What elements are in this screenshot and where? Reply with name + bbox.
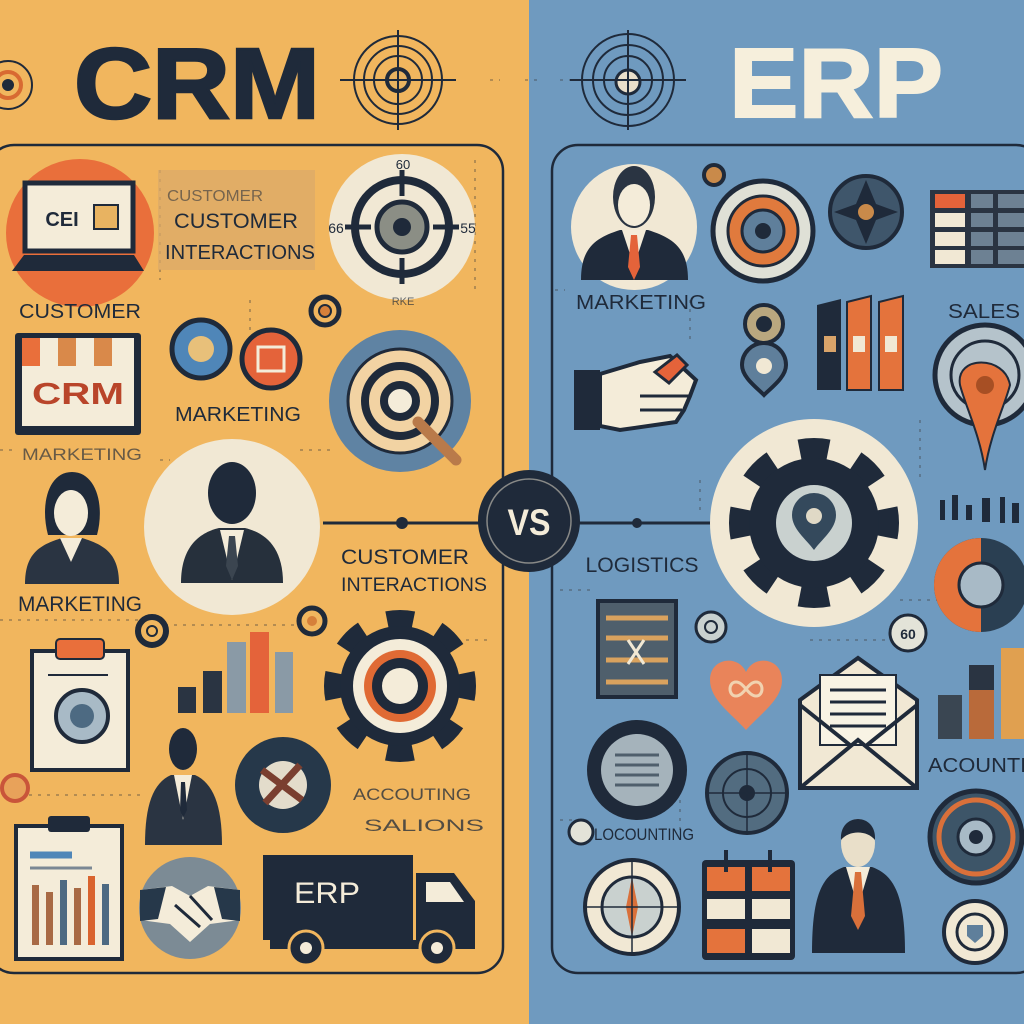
- label: faded marketing: MARKETING: [22, 445, 142, 464]
- icon: blue badge: [172, 320, 230, 378]
- icon: small ring: [299, 608, 325, 634]
- icon: gear with orange ring: [322, 608, 478, 764]
- label: customer interactions lower: CUSTOMER: [341, 546, 469, 569]
- icon: cream dial target: 60: [396, 157, 410, 172]
- icon: small ring left: [138, 617, 166, 645]
- icon: large person avatar: [144, 439, 320, 615]
- label: customer interactions lower: [341, 546, 487, 596]
- icon: target with magnifier: [329, 330, 471, 472]
- icon: handshake: [139, 857, 241, 959]
- icon: left top eye target: [0, 61, 32, 109]
- icon: ERP header target: [570, 30, 686, 130]
- bar chart: right: [938, 648, 1024, 739]
- icon: envelope: [800, 658, 917, 788]
- icon: location rings: [742, 305, 786, 395]
- icon: document list: [598, 601, 676, 697]
- icon: calendars: [702, 850, 795, 960]
- icon: radial emblem: [235, 737, 331, 833]
- connector left: [323, 517, 480, 529]
- icon: crosshair circle: [707, 753, 787, 833]
- icon: tall orange tags: [817, 296, 903, 390]
- icon: donut chart: [934, 538, 1024, 632]
- label: marketing center: MARKETING: [175, 404, 301, 426]
- icon: CRM store: [15, 333, 141, 435]
- icon: dark compass: [830, 176, 902, 248]
- icon: woman avatar: [25, 472, 119, 584]
- icon: dark list circle: [587, 720, 687, 820]
- VS badge: VS: [508, 502, 550, 543]
- icon: heart: [710, 661, 782, 730]
- icon: small shield circle: [944, 901, 1006, 963]
- connector right: [578, 518, 712, 528]
- icon: small ring 60: [890, 615, 926, 651]
- title: ERP: ERP: [729, 28, 943, 138]
- VS badge: [478, 470, 580, 572]
- text box: customer interactions: INTERACTIONS: [165, 242, 315, 264]
- icon: CRM header target: [340, 30, 456, 130]
- icon: ERP truck: [263, 855, 475, 965]
- label: accounting: ACCOUTING: [353, 785, 471, 804]
- label: salions: SALIONS: [364, 816, 484, 835]
- icon: orange ring: [930, 791, 1022, 883]
- icon: mini bars: [940, 495, 1019, 523]
- icon: laptop on orange circle: CEI: [45, 209, 79, 231]
- icon: small ring doc: [696, 612, 726, 642]
- text box: customer interactions: CUSTOMER: [167, 188, 263, 205]
- icon: clipboard with dial: [32, 639, 128, 770]
- label: customer: CUSTOMER: [19, 301, 141, 323]
- decorative dots: [0, 80, 990, 830]
- icon: large gear: [710, 419, 918, 627]
- label: customer interactions lower: INTERACTIONS: [341, 575, 487, 596]
- icon: laptop on orange circle: [6, 159, 154, 307]
- icon: cream dial target: 55: [460, 220, 476, 236]
- icon: compass cream: [585, 860, 679, 954]
- title: CRM: CRM: [74, 28, 320, 140]
- icon: orange target: [713, 181, 813, 281]
- icon: cream dial target: RKE: [392, 296, 414, 308]
- icon: bar chart report: [16, 816, 122, 959]
- label: sales: SALES: [948, 301, 1020, 323]
- icon: cream dial target: 66: [328, 220, 344, 236]
- icon: small orange circle: [2, 775, 28, 801]
- icon: orange badge: [242, 330, 300, 388]
- icon: small ring 60: 60: [900, 626, 916, 642]
- text box: customer interactions: CUSTOMER: [174, 210, 298, 233]
- label: marketing: MARKETING: [18, 593, 142, 616]
- bar chart: left: [178, 632, 293, 713]
- icon: businessman right: [812, 819, 905, 953]
- text box: customer interactions: [158, 170, 315, 270]
- icon: pointing hand: [574, 355, 696, 430]
- icon: person on right: [571, 164, 697, 290]
- icon: small target: [311, 297, 339, 325]
- label: marketing right: MARKETING: [576, 292, 706, 314]
- label: logistics: LOGISTICS: [586, 554, 698, 577]
- icon: cream dial target: [328, 154, 476, 308]
- icon: small ring accounting: [569, 820, 593, 844]
- label: accounting lower: LOCOUNTING: [594, 825, 694, 844]
- icon: businessman: [145, 728, 222, 845]
- icon: ERP truck: ERP: [294, 877, 360, 910]
- icon: small ring top: [704, 165, 724, 185]
- icon: server table: [930, 190, 1024, 268]
- icon: pin target: [935, 325, 1024, 470]
- icon: CRM store: CRM: [32, 376, 124, 411]
